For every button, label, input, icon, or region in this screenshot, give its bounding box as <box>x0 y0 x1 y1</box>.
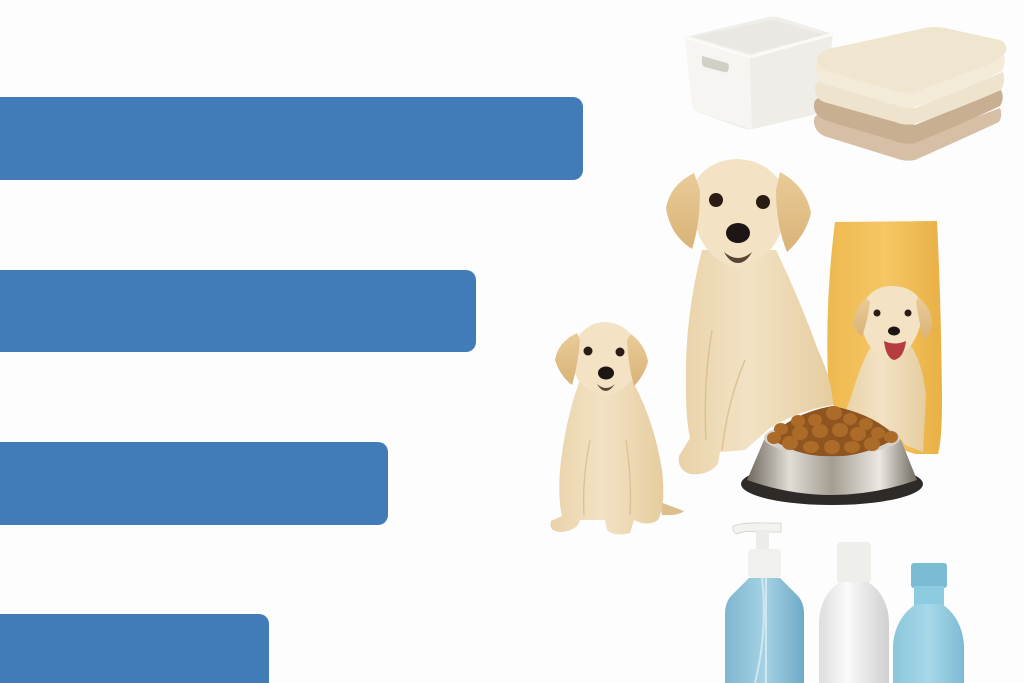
kibble mound <box>770 406 897 456</box>
icon: stack of towels <box>814 27 1006 161</box>
nose <box>726 223 750 243</box>
tail <box>660 502 684 515</box>
nose <box>598 366 614 380</box>
icon: pump bottle <box>725 523 804 683</box>
icon: teal bottle <box>893 563 964 683</box>
kibble <box>767 406 898 454</box>
large puppy <box>666 159 833 474</box>
icon: white bottle <box>819 542 889 683</box>
bar 4 <box>0 614 269 683</box>
small puppy <box>550 322 684 534</box>
head <box>692 159 786 268</box>
puppy on bag <box>845 286 932 452</box>
body <box>550 380 663 534</box>
icon: food bag <box>827 221 942 454</box>
icon: food bowl <box>741 406 923 505</box>
ears <box>555 333 580 385</box>
bar 3 <box>0 442 388 525</box>
eyes <box>709 193 723 207</box>
bar chart <box>0 97 583 683</box>
icon: storage bin <box>685 17 833 129</box>
bar 2 <box>0 270 476 352</box>
body <box>679 250 833 474</box>
ears <box>666 173 700 249</box>
bar 1 <box>0 97 583 180</box>
head <box>572 322 639 396</box>
eyes <box>584 346 592 356</box>
